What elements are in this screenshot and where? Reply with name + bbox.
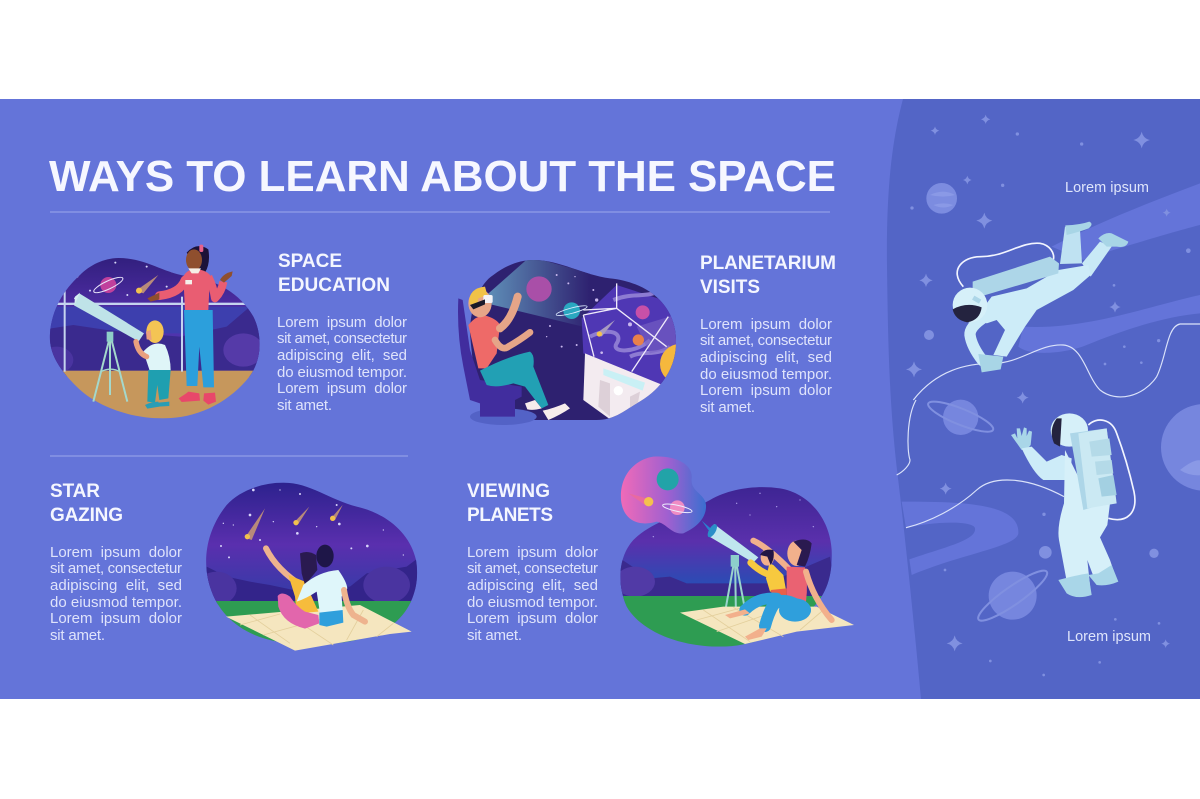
panel: planetarium visits illustration [458, 260, 676, 425]
text block: star gazing: Lorem ipsum dolor [50, 544, 182, 561]
heading: viewing planets: PLANETS [467, 505, 553, 526]
text block: star gazing: do eiusmod tempor. [50, 594, 182, 611]
background band [0, 99, 1200, 699]
text block: space education: sit amet. [277, 397, 332, 414]
text block: space education [277, 314, 407, 414]
telescope [706, 523, 758, 622]
label: lorem ipsum bottom: Lorem ipsum [1067, 629, 1151, 645]
stars [906, 115, 1191, 676]
text block: planetarium visits [700, 316, 832, 416]
text block: star gazing [50, 544, 182, 644]
planets [925, 183, 1200, 627]
text block: planetarium visits: adipiscing elit, sed [700, 349, 832, 366]
panel: viewing planets illustration [610, 456, 854, 653]
blanket [680, 607, 854, 644]
text block: star gazing: adipiscing elit, sed [50, 577, 182, 594]
text block: space education: adipiscing elit, sed [277, 347, 407, 364]
text block: viewing planets: sit amet, consectetur [467, 560, 598, 577]
label: lorem ipsum top: Lorem ipsum [1065, 180, 1149, 196]
heading: space education: EDUCATION [278, 275, 390, 296]
right space panel [887, 99, 1200, 699]
text block: viewing planets [467, 544, 598, 644]
panel: star gazing illustration [206, 482, 418, 651]
text block: space education: sit amet, consectetur [277, 330, 407, 347]
text block: star gazing: Lorem ipsum dolor [50, 610, 182, 627]
text block: viewing planets: Lorem ipsum dolor [467, 610, 598, 627]
telescope [74, 293, 144, 402]
text block: viewing planets: do eiusmod tempor. [467, 594, 598, 611]
heading: star gazing: GAZING [50, 505, 123, 526]
viewer [468, 287, 570, 420]
heading: space education: SPACE [278, 251, 342, 272]
text block: space education: Lorem ipsum dolor [277, 314, 407, 331]
text block: viewing planets: sit amet. [467, 627, 522, 644]
nebula [621, 456, 718, 535]
heading: viewing planets [467, 481, 553, 526]
heading: planetarium visits [700, 253, 836, 298]
astronaut two [1011, 413, 1118, 597]
text block: planetarium visits: Lorem ipsum dolor [700, 382, 832, 399]
text block: space education: Lorem ipsum dolor [277, 380, 407, 397]
title: WAYS TO LEARN ABOUT THE SPACE [49, 152, 836, 201]
text block: planetarium visits: sit amet. [700, 399, 755, 416]
heading: planetarium visits: PLANETARIUM [700, 253, 836, 274]
heading: space education [278, 251, 390, 296]
text block: planetarium visits: sit amet, consectetur [700, 332, 832, 349]
text block: planetarium visits: Lorem ipsum dolor [700, 316, 832, 333]
text block: planetarium visits: do eiusmod tempor. [700, 366, 832, 383]
text block: viewing planets: Lorem ipsum dolor [467, 544, 598, 561]
panel: space scene [897, 115, 1200, 676]
teacher [147, 245, 233, 405]
text block: viewing planets: adipiscing elit, sed [467, 577, 598, 594]
heading: viewing planets: VIEWING [467, 481, 550, 502]
parent and child [725, 540, 832, 640]
tethers [897, 324, 1200, 528]
heading: planetarium visits: VISITS [700, 277, 760, 298]
text block: star gazing: sit amet. [50, 627, 105, 644]
text block: star gazing: sit amet, consectetur [50, 560, 182, 577]
heading: star gazing: STAR [50, 481, 100, 502]
panel: space education illustration [50, 244, 260, 418]
heading: star gazing [50, 481, 123, 526]
text block: space education: do eiusmod tempor. [277, 364, 407, 381]
seat [458, 298, 537, 425]
child [136, 320, 171, 409]
blanket [226, 605, 412, 651]
swooshes [902, 183, 1200, 575]
astronaut one [953, 222, 1128, 372]
couple [266, 545, 365, 629]
